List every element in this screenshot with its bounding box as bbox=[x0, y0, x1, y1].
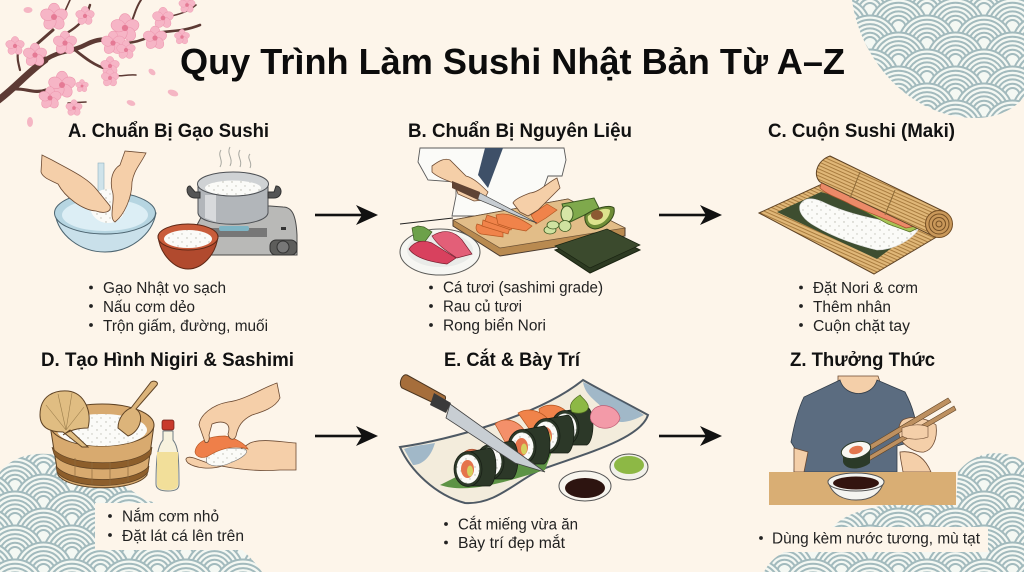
icon: red rice bowl bbox=[158, 224, 218, 269]
bullet list A: Trộn giấm, đường, muối bbox=[103, 318, 268, 335]
bullet list D: Đặt lát cá lên trên bbox=[122, 528, 244, 545]
panel: A. rice preparation bbox=[41, 121, 297, 335]
bullet list E: Cắt miếng vừa ăn bbox=[458, 516, 578, 534]
heading Z: Z. Thưởng Thức bbox=[790, 350, 935, 371]
bullet list C: Cuộn chặt tay bbox=[813, 318, 910, 335]
arrow A to B bbox=[315, 205, 378, 225]
bullet list Z: Dùng kèm nước tương, mù tạt bbox=[772, 530, 981, 548]
wave pattern: bottom left bbox=[0, 454, 262, 572]
bullet list A bbox=[89, 280, 268, 335]
cherry blossom branch bbox=[0, 0, 200, 127]
bullet list B: Rong biển Nori bbox=[443, 318, 546, 334]
bullet list E bbox=[444, 516, 578, 552]
arrow E to Z bbox=[659, 426, 722, 446]
wave pattern: bottom right bbox=[764, 453, 1024, 572]
bullet list D bbox=[108, 508, 244, 545]
bullet list E: Bày trí đẹp mắt bbox=[458, 535, 566, 552]
panel: C. rolling maki bbox=[759, 121, 955, 335]
heading B: B. Chuẩn Bị Nguyên Liệu bbox=[408, 121, 632, 142]
icon: pot on gas stove bbox=[187, 147, 297, 255]
bullet list B bbox=[429, 280, 603, 334]
icon: washing rice in bowl bbox=[41, 151, 156, 252]
icon: person eating sushi with chopsticks bbox=[769, 376, 956, 505]
heading E: E. Cắt & Bày Trí bbox=[444, 349, 581, 371]
bullet list B: Cá tươi (sashimi grade) bbox=[443, 280, 603, 296]
panel: Z. enjoying bbox=[759, 350, 981, 548]
wave pattern: top right bbox=[852, 0, 1024, 118]
heading A: A. Chuẩn Bị Gạo Sushi bbox=[68, 121, 269, 142]
bullet list B: Rau củ tươi bbox=[443, 298, 522, 316]
icon: chef slicing salmon bbox=[400, 148, 640, 275]
heading D: D. Tạo Hình Nigiri & Sashimi bbox=[41, 350, 294, 371]
bullet list C: Thêm nhân bbox=[813, 299, 891, 316]
bullet list A: Nấu cơm dẻo bbox=[103, 299, 195, 316]
icon: hands shaping nigiri bbox=[186, 383, 296, 471]
heading C: C. Cuộn Sushi (Maki) bbox=[768, 121, 955, 142]
arrow B to C bbox=[659, 205, 722, 225]
icon: wooden rice tub, fan and paddle bbox=[40, 381, 157, 488]
icon: sushi plate with knife bbox=[400, 375, 648, 503]
panel: D. shaping nigiri bbox=[40, 350, 296, 545]
bullet list C: Đặt Nori & cơm bbox=[813, 280, 918, 297]
panel: E. cutting and plating bbox=[400, 349, 648, 552]
arrow D to E bbox=[315, 426, 378, 446]
title: Quy Trình Làm Sushi Nhật Bản Từ A–Z bbox=[180, 41, 845, 82]
icon: vinegar bottle bbox=[156, 420, 179, 491]
text backing: bottom right bbox=[750, 527, 988, 552]
bullet list C bbox=[799, 280, 918, 335]
bullet list A: Gạo Nhật vo sạch bbox=[103, 280, 226, 297]
panel: B. ingredients bbox=[400, 121, 640, 334]
icon: bamboo mat with maki bbox=[759, 156, 952, 274]
text backing: bottom left bbox=[95, 503, 260, 550]
bullet list D: Nắm cơm nhỏ bbox=[122, 508, 219, 526]
